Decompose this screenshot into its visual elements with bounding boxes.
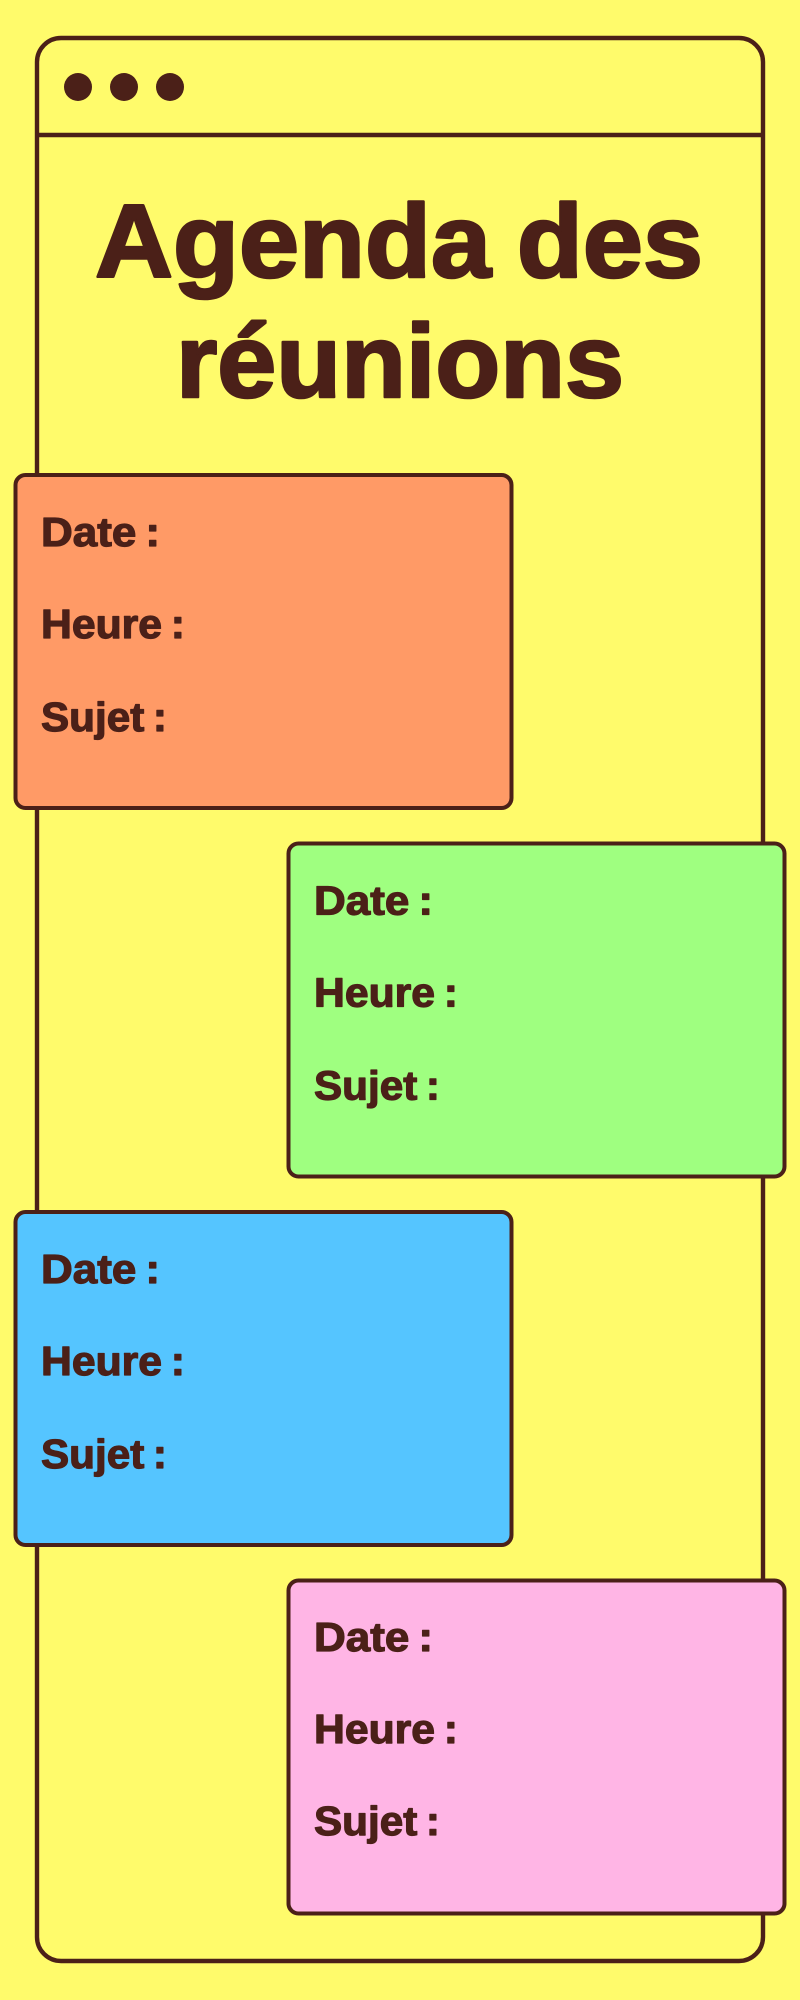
panel: blue meeting card: Heure :: [41, 1338, 185, 1384]
title: Agenda des: [95, 184, 703, 300]
panel: orange meeting card: Sujet :: [41, 694, 167, 740]
title: [95, 184, 703, 420]
panel: green meeting card: [288, 844, 784, 1176]
title: réunions: [176, 304, 624, 420]
panel: blue meeting card: Sujet :: [41, 1431, 167, 1477]
panel: pink meeting card: Sujet :: [314, 1798, 440, 1844]
panel: green meeting card: Sujet :: [314, 1062, 440, 1108]
panel: green meeting card: Date :: [314, 878, 433, 924]
panel: orange meeting card: Date :: [41, 509, 160, 555]
panel: blue meeting card: [16, 1212, 512, 1545]
icon: window control dots: [64, 73, 184, 101]
panel: orange meeting card: Heure :: [41, 601, 185, 647]
panel: pink meeting card: [288, 1580, 784, 1914]
panel: blue meeting card: Date :: [41, 1246, 160, 1292]
panel: pink meeting card: Heure :: [314, 1706, 458, 1752]
panel: green meeting card: Heure :: [314, 970, 458, 1016]
panel: pink meeting card: Date :: [314, 1614, 433, 1660]
panel: orange meeting card: [16, 475, 512, 808]
